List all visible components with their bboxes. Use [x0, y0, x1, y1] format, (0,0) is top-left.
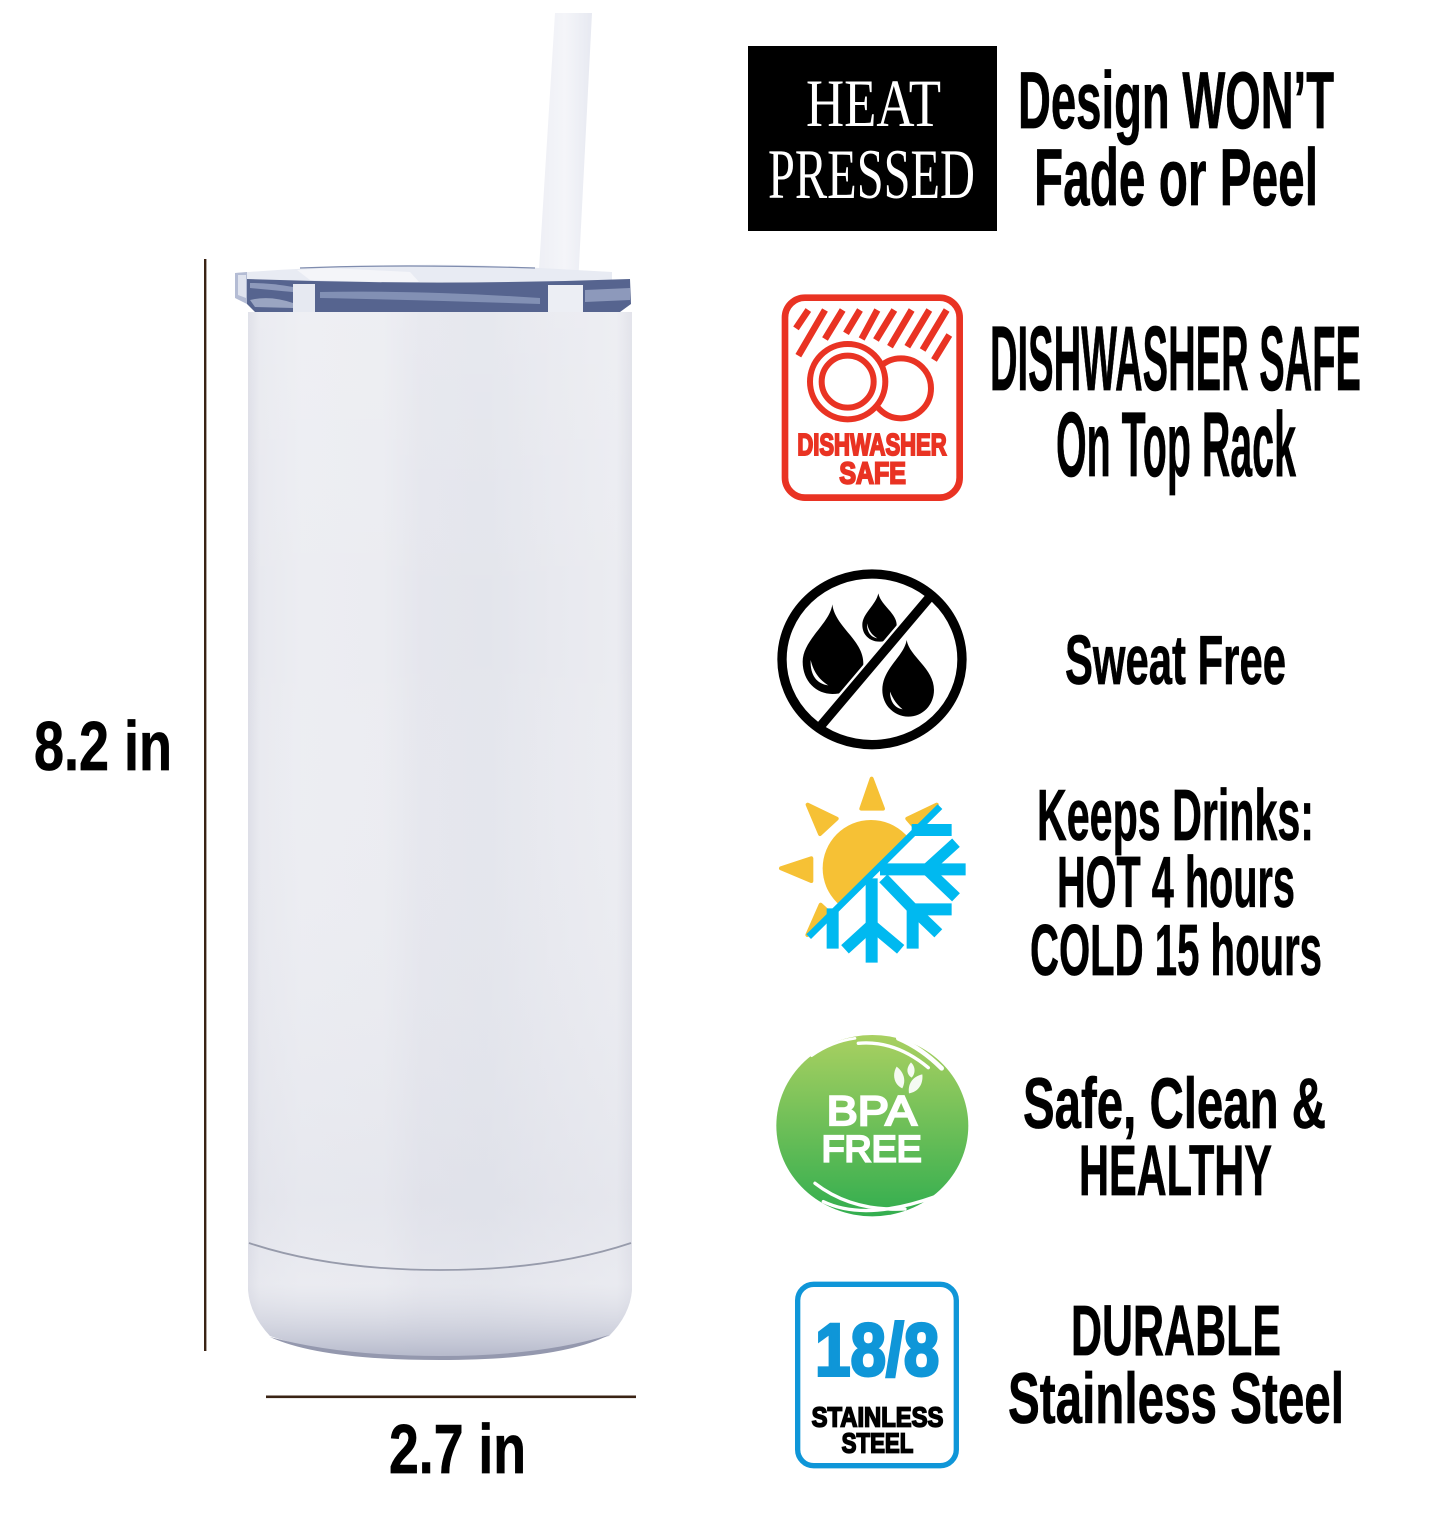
tumbler lid [235, 265, 631, 312]
icon: hot and cold [781, 779, 966, 963]
icon: 18/8 stainless steel: STEEL [842, 1428, 913, 1459]
stainless steel text [1008, 1292, 1344, 1439]
icon: no sweat drops [782, 574, 962, 745]
hot and cold text [1030, 776, 1322, 991]
bpa free text [1023, 1065, 1326, 1211]
tumbler illustration [235, 13, 632, 1360]
icon: bpa free: BPA [827, 1087, 917, 1134]
straw [538, 13, 592, 285]
heat pressed text [1018, 56, 1334, 223]
heat pressed badge [748, 46, 997, 231]
height dimension line [204, 259, 206, 1351]
base seam [249, 1243, 631, 1270]
icon: 18/8 stainless steel: 18/8 [815, 1309, 939, 1392]
width dimension line [266, 1396, 636, 1398]
sweat free text: Sweat Free [1065, 621, 1286, 699]
icon: 18/8 stainless steel [798, 1284, 956, 1466]
icon: dishwasher safe: DISHWASHER [797, 428, 947, 462]
icon: bpa free [776, 1035, 968, 1216]
bpa free text: HEALTHY [1079, 1132, 1272, 1211]
icon: dishwasher safe [785, 298, 960, 498]
heat pressed badge: PRESSED [768, 136, 975, 214]
icon: bpa free: FREE [822, 1128, 922, 1170]
icon: dishwasher safe: SAFE [839, 456, 906, 490]
tumbler body [248, 312, 632, 1357]
heat pressed badge: HEAT [806, 65, 941, 141]
stainless steel text: DURABLE [1071, 1292, 1281, 1371]
height label: 8.2 in [34, 707, 172, 785]
width label: 2.7 in [389, 1410, 526, 1488]
dishwasher text [990, 308, 1361, 496]
icon: 18/8 stainless steel: STAINLESS [812, 1402, 943, 1433]
base shadow [270, 1335, 609, 1360]
